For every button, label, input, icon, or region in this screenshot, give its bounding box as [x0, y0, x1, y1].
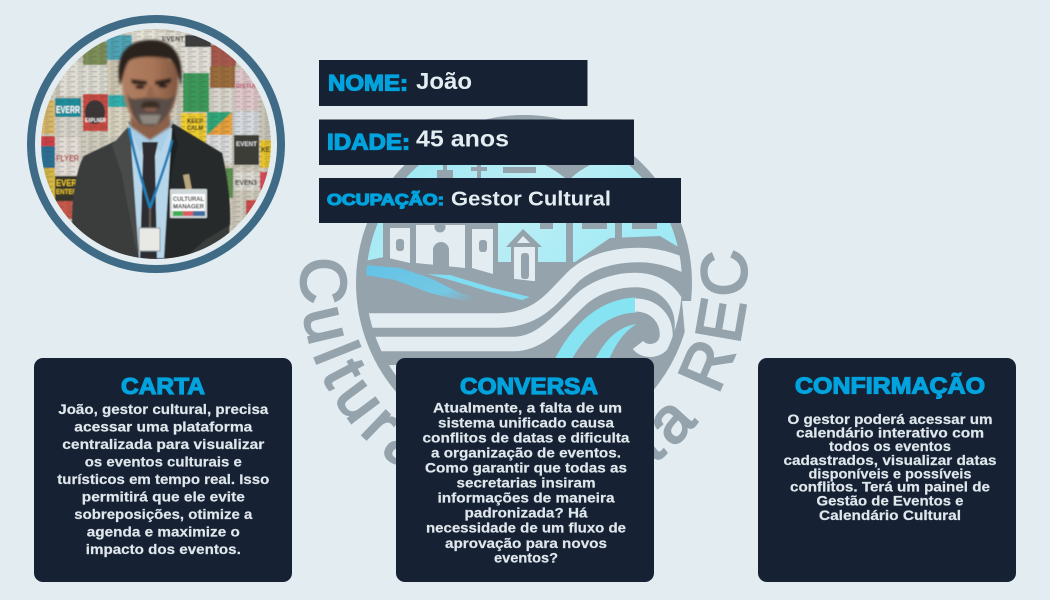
poster print texture	[41, 29, 271, 230]
logo ring	[361, 120, 687, 446]
body text: confirmacao: Gestão de Eventos e	[816, 493, 964, 509]
body text: confirmacao: todos os eventos	[829, 438, 951, 454]
panel: conversa	[396, 358, 654, 582]
field: idade	[319, 120, 634, 165]
body text: carta: impacto dos eventos.	[86, 541, 241, 557]
label: nome: NOME:	[328, 70, 408, 96]
value: ocupacao: Gestor Cultural	[451, 189, 611, 211]
body text: carta: agenda e maximize o	[87, 524, 240, 540]
body text: conversa: padronizada? Há	[464, 505, 588, 521]
poster wall: EVEN3	[235, 178, 257, 187]
neck	[128, 114, 172, 142]
value: idade: 45 anos	[416, 126, 509, 152]
label: ocupacao: OCUPAÇÃO:	[327, 191, 444, 209]
panel: carta	[34, 358, 292, 582]
body text: conversa: Atualmente, a falta de um	[433, 400, 622, 416]
body text: conversa	[422, 400, 630, 566]
portrait badge	[31, 19, 281, 269]
poster wall: FLYER	[56, 154, 79, 163]
name badge: CULTURAL	[173, 196, 204, 203]
panel: confirmacao	[758, 358, 1016, 582]
poster wall: EVENT	[162, 36, 184, 43]
body text: conversa: eventos?	[494, 550, 558, 566]
body text: conversa: secretarias insiram	[456, 474, 596, 490]
logo circular wordmark: Cultura Conecta REC	[300, 250, 748, 464]
poster wall: EXPLNER	[85, 118, 106, 124]
poster wall: DISTUR	[236, 83, 258, 90]
label: idade: IDADE:	[327, 129, 410, 154]
watermark logo: Cultura Conecta REC	[300, 115, 748, 464]
poster wall: EVENT	[236, 141, 257, 148]
name badge	[170, 189, 207, 218]
body text: conversa: informações de maneira	[438, 490, 615, 506]
body text: conversa: conflitos de datas e dificulta	[422, 430, 630, 446]
body text: confirmacao: Calendário Cultural	[819, 507, 961, 523]
body text: conversa: aprovação para novos	[445, 535, 607, 551]
poster texts: EVERR	[56, 105, 81, 116]
logo emblem	[366, 165, 682, 373]
body text: carta: acessar uma plataforma	[74, 418, 253, 434]
field: ocupacao	[319, 178, 681, 223]
poster wall: EVER	[56, 178, 77, 188]
body text: carta: João, gestor cultural, precisa	[58, 401, 269, 417]
name badge: MANAGER	[173, 204, 204, 210]
body text: carta: sobreposições, otimize a	[74, 506, 253, 522]
body text: confirmacao: O gestor poderá acessar um	[788, 411, 992, 427]
hair	[118, 40, 182, 86]
heading: confirmacao: CONFIRMAÇÃO	[795, 372, 985, 398]
body text: confirmacao: calendário interativo com	[796, 424, 984, 440]
brows and eyes	[131, 78, 171, 85]
body text: confirmacao: disponíveis e possíveis	[808, 465, 972, 481]
portrait photo	[40, 28, 273, 262]
body text: carta: centralizada para visualizar	[62, 436, 265, 452]
poster wall	[40, 28, 273, 260]
heading: conversa: CONVERSA	[460, 373, 598, 399]
poster wall: KE	[261, 145, 270, 154]
body text: carta	[57, 401, 269, 557]
body text: carta: permitirá que ele evite	[82, 488, 245, 504]
body text: conversa: Como garantir que todas as	[425, 460, 627, 476]
manager figure	[72, 112, 230, 262]
body text: conversa: necessidade de um fluxo de	[426, 520, 626, 536]
body text: confirmacao: cadastrados, visualizar datas	[784, 452, 997, 468]
head	[118, 40, 182, 140]
face	[122, 56, 178, 126]
heading: carta: CARTA	[121, 373, 205, 399]
value: nome: João	[416, 68, 472, 94]
body text: confirmacao: conflitos. Terá um painel de	[790, 479, 990, 495]
body text: conversa: a organização de eventos.	[431, 444, 621, 460]
poster wall: KEEP	[187, 118, 204, 125]
body text: carta: os eventos culturais e	[85, 454, 242, 470]
body text: carta: turísticos em tempo real. Isso	[57, 471, 269, 487]
poster wall: CALM	[187, 125, 203, 132]
poster wall: ENTER	[56, 189, 77, 196]
portrait ring	[31, 19, 281, 269]
logo ring opening	[682, 301, 700, 346]
body text: confirmacao	[784, 411, 997, 523]
beard	[127, 94, 175, 126]
field: nome	[319, 60, 588, 106]
body text: conversa: sistema unificado causa	[438, 415, 614, 431]
